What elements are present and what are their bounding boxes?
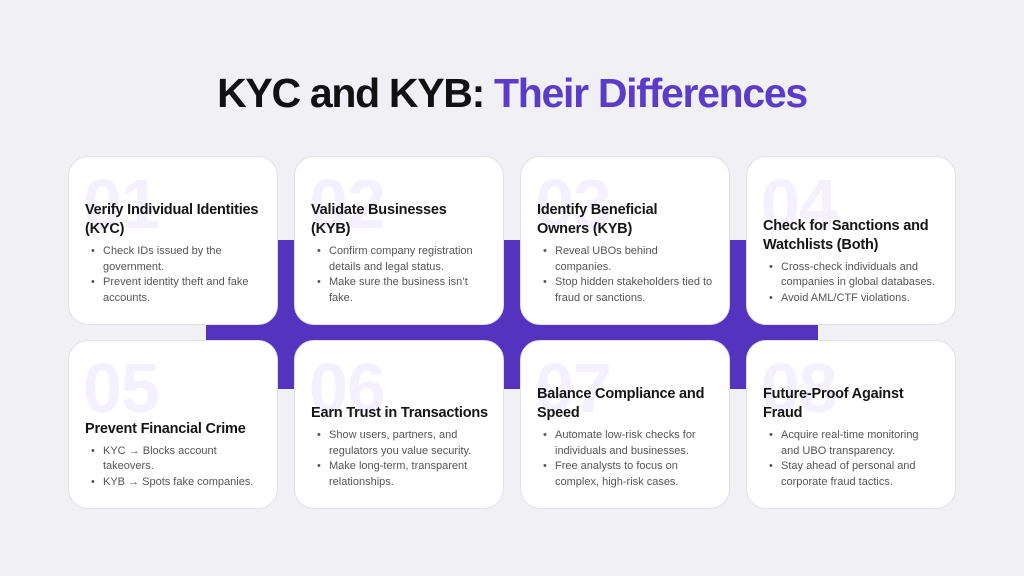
- card 01: Check IDs issued by the: [103, 245, 222, 257]
- card 04: [746, 156, 956, 325]
- card 04: companies in global databases.: [781, 276, 935, 288]
- card 05: [68, 340, 278, 509]
- card 03: [520, 156, 730, 325]
- card 01: 01: [83, 165, 159, 243]
- card 01: government.: [103, 260, 164, 272]
- card 04: Watchlists (Both): [763, 236, 878, 252]
- card 01: accounts.: [103, 292, 150, 304]
- card 03: Identify Beneficial: [537, 202, 657, 218]
- card 07: individuals and businesses.: [555, 444, 689, 456]
- card 06: relationships.: [329, 476, 394, 488]
- card 06: 06: [309, 349, 385, 427]
- title: KYC and KYB: Their Differences: [217, 70, 807, 116]
- card 04: Check for Sanctions and: [763, 218, 928, 234]
- card 05: takeovers.: [103, 460, 154, 472]
- card 08: and UBO transparency.: [781, 444, 895, 456]
- card 05: KYC → Blocks account: [103, 444, 217, 456]
- card 07: complex, high-risk cases.: [555, 476, 678, 488]
- card 04: Cross-check individuals and: [781, 260, 918, 272]
- card 07: 07: [535, 349, 611, 427]
- card 03: companies.: [555, 260, 611, 272]
- card 07: Automate low-risk checks for: [555, 429, 696, 441]
- card 08: corporate fraud tactics.: [781, 476, 893, 488]
- card 03: Owners (KYB): [537, 221, 632, 237]
- card 03: Stop hidden stakeholders tied to: [555, 276, 712, 288]
- purple connector band: [206, 240, 818, 389]
- card 04: 04: [761, 165, 837, 243]
- card 08: 08: [761, 349, 837, 427]
- card 02: Confirm company registration: [329, 245, 473, 257]
- card 07: [520, 340, 730, 509]
- card 07: Free analysts to focus on: [555, 460, 678, 472]
- card 02: [294, 156, 504, 325]
- card 01: [68, 156, 278, 325]
- card 04: Avoid AML/CTF violations.: [781, 292, 910, 304]
- card 03: Reveal UBOs behind: [555, 245, 658, 257]
- card 03: fraud or sanctions.: [555, 292, 646, 304]
- card 05: 05: [83, 349, 159, 427]
- card 06: Earn Trust in Transactions: [311, 405, 488, 421]
- card 06: [294, 340, 504, 509]
- card 05: Prevent Financial Crime: [85, 420, 246, 436]
- card 01: Prevent identity theft and fake: [103, 276, 249, 288]
- card 02: Validate Businesses: [311, 202, 447, 218]
- card 08: [746, 340, 956, 509]
- card 08: Acquire real-time monitoring: [781, 429, 919, 441]
- card 06: Show users, partners, and: [329, 429, 457, 441]
- card 02: fake.: [329, 292, 353, 304]
- card 08: Fraud: [763, 405, 802, 421]
- card 06: Make long-term, transparent: [329, 460, 467, 472]
- card 07: Balance Compliance and: [537, 386, 704, 402]
- card 02: 02: [309, 165, 385, 243]
- card 01: (KYC): [85, 221, 124, 237]
- card 02: Make sure the business isn’t: [329, 276, 468, 288]
- card 08: Future-Proof Against: [763, 386, 903, 402]
- card 01: Verify Individual Identities: [85, 202, 258, 218]
- card 02: details and legal status.: [329, 260, 444, 272]
- card 07: Speed: [537, 405, 580, 421]
- card 02: (KYB): [311, 221, 350, 237]
- card 05: KYB → Spots fake companies.: [103, 476, 253, 488]
- card 08: Stay ahead of personal and: [781, 460, 916, 472]
- card 06: regulators you value security.: [329, 444, 471, 456]
- card 03: 03: [535, 165, 611, 243]
